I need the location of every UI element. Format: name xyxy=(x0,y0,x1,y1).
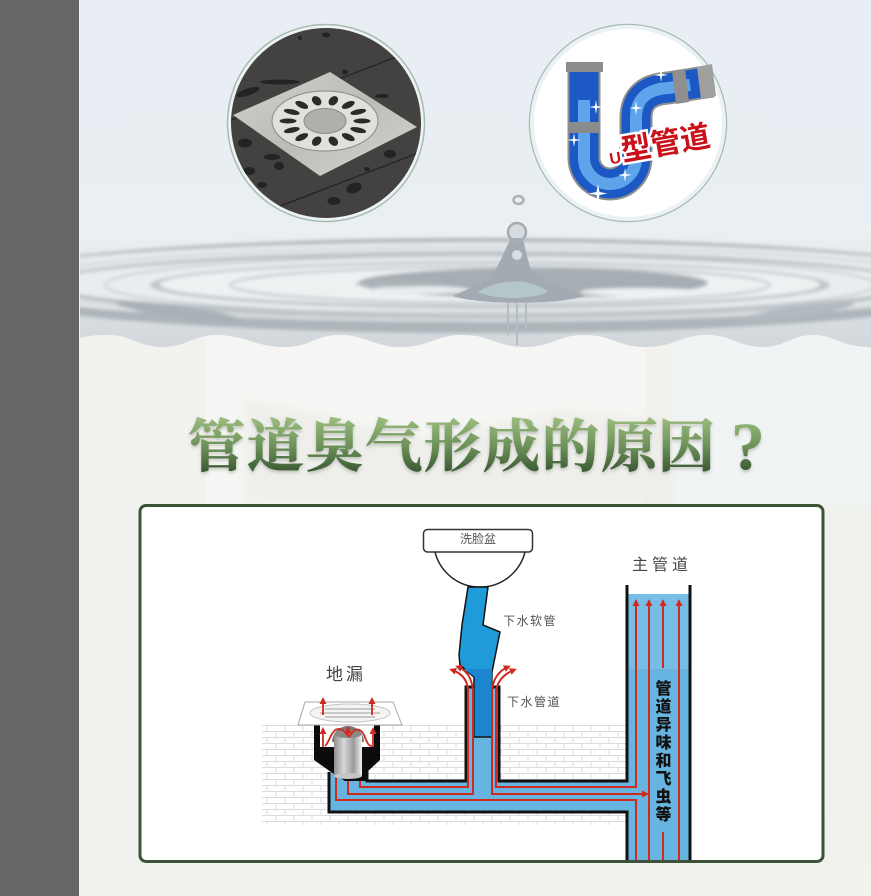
drain hose xyxy=(459,587,500,737)
water drop falling xyxy=(514,196,524,204)
label: odours and insects: 飞 xyxy=(655,770,672,788)
label: floor drain: 地漏 xyxy=(326,665,366,684)
water splash column xyxy=(453,240,584,345)
label: drain pipe: 下水管道 xyxy=(507,694,561,709)
pipe network water xyxy=(329,594,690,860)
U-pipe label: U xyxy=(608,150,623,168)
label: odours and insects: 虫 xyxy=(655,788,672,806)
floor drain xyxy=(298,700,402,781)
pipe network walls xyxy=(329,585,690,860)
label: odours and insects: 异 xyxy=(655,717,672,734)
title: 管道臭气形成的原因 xyxy=(188,401,715,483)
photo circle: U-shaped pipe xyxy=(530,24,726,222)
label: drain hose: 下水软管 xyxy=(503,613,557,628)
water ripple scene xyxy=(80,222,871,347)
label: odours and insects: 等 xyxy=(655,805,672,824)
label: odours and insects: 味 xyxy=(655,734,672,752)
U-pipe label: 型管道 xyxy=(617,111,713,170)
label: main pipe: 主管道 xyxy=(632,556,692,574)
drain plate xyxy=(233,72,417,176)
label: odours and insects: 和 xyxy=(655,752,672,770)
title: ? xyxy=(731,408,765,484)
U pipe body xyxy=(584,72,712,184)
lower textured background with wave edge xyxy=(80,335,871,508)
panel: diagram xyxy=(140,506,823,862)
photo circle: floor drain xyxy=(226,24,426,224)
washbasin xyxy=(424,530,532,587)
label: odours and insects xyxy=(655,679,672,824)
red airflow lines xyxy=(336,602,679,860)
water drop on neck xyxy=(508,223,526,245)
label: odours and insects: 道 xyxy=(655,697,672,716)
label: odours and insects: 管 xyxy=(655,679,672,698)
brick wall xyxy=(262,725,628,825)
left grey band xyxy=(0,0,79,896)
washbasin: 洗脸盆 xyxy=(460,532,496,546)
